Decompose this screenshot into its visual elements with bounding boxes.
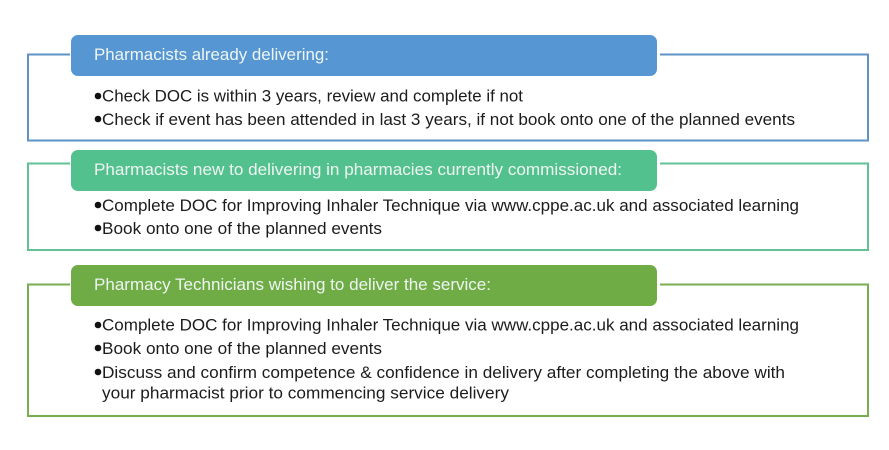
bullet list: pharmacists new to delivering: Complete DOC for Improving Inhaler Technique via www.cppe.ac.uk and associated learning (102, 197, 799, 215)
heading bar: pharmacists already delivering: Pharmacists already delivering: (94, 46, 329, 64)
panel outline: teal green (28, 164, 868, 250)
bullet list: pharmacists already delivering: Check DOC is within 3 years, review and complete if not (102, 88, 523, 106)
bullet list: pharmacy technicians (95, 316, 799, 402)
bullet list: pharmacists already delivering (95, 88, 795, 129)
bullet list: pharmacists new to delivering (95, 197, 799, 238)
bullet list: pharmacists already delivering: Check if event has been attended in last 3 years, if not book onto one of the planned events (102, 111, 795, 129)
heading bar: pharmacists new to delivering: Pharmacists new to delivering in pharmacies currently commissioned: (94, 161, 622, 179)
heading bar: pharmacy technicians (71, 265, 657, 306)
panel: pharmacy technicians (28, 265, 868, 416)
heading bar: pharmacy technicians: Pharmacy Technicians wishing to deliver the service: (94, 276, 491, 294)
bullet list: pharmacy technicians: Book onto one of the planned events (102, 340, 382, 358)
bullet list: pharmacists new to delivering: Book onto one of the planned events (102, 220, 382, 238)
bullet list: pharmacy technicians: your pharmacist prior to commencing service delivery (102, 384, 510, 402)
panel outline: blue (28, 54, 868, 140)
heading bar: pharmacists new to delivering (71, 150, 657, 191)
bullet list: pharmacy technicians: Discuss and confirm competence & confidence in delivery after completing the above with (102, 364, 785, 382)
panel: pharmacists already delivering (28, 35, 868, 140)
panel outline: green (28, 284, 868, 416)
panel: pharmacists new to delivering (28, 150, 868, 250)
bullet list: pharmacy technicians: Complete DOC for Improving Inhaler Technique via www.cppe.ac.uk and associated learning (102, 316, 799, 334)
heading bar: pharmacists already delivering (71, 35, 657, 76)
